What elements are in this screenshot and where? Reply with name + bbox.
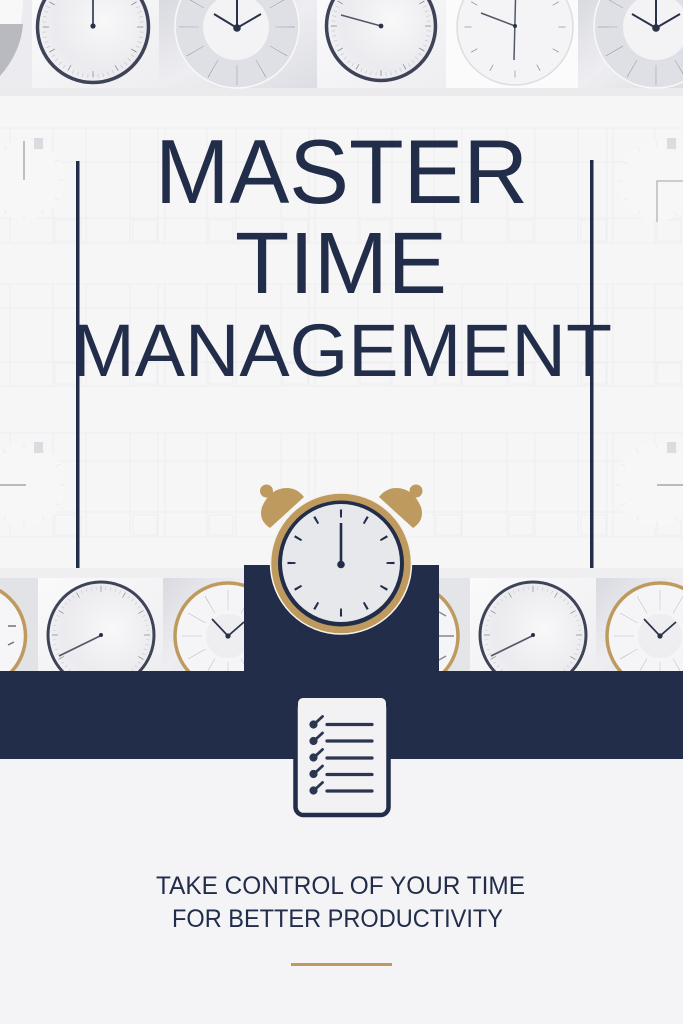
- title: [72, 122, 612, 392]
- right bell: [379, 488, 422, 528]
- clock face: [282, 504, 400, 622]
- right knob: [410, 484, 422, 498]
- clock hand: [340, 523, 342, 564]
- gold clock cropped left: [0, 589, 28, 671]
- icon: checklist: [296, 698, 388, 815]
- icon: alarm clock: [260, 484, 422, 634]
- tagline: TAKE CONTROL OF YOUR TIME: [156, 872, 525, 900]
- navy pedestal block: [244, 565, 439, 672]
- title: TIME: [235, 215, 447, 312]
- dark clock right: [478, 580, 588, 671]
- right vertical rule: [590, 160, 594, 570]
- clock 3: [326, 0, 436, 80]
- lower clocks row: [0, 580, 683, 671]
- left bell: [261, 488, 304, 528]
- clock rim: [270, 493, 412, 634]
- navy horizontal band: [0, 671, 683, 759]
- gold clock middle: [173, 581, 244, 671]
- clock inner ring: [278, 500, 404, 626]
- gold accent rule: [291, 963, 392, 966]
- clock 0: cropped: [0, 0, 23, 76]
- gold clock cropped by block: [439, 593, 460, 671]
- faint calendar grid pattern: [0, 128, 683, 537]
- tagline: [156, 872, 525, 933]
- title: MASTER: [155, 122, 528, 223]
- clock 2: [175, 0, 299, 88]
- top clock strip: [0, 0, 683, 96]
- gold clock right: [605, 581, 683, 671]
- left vertical rule: [76, 161, 80, 570]
- dark clock left: [46, 580, 156, 671]
- tagline: FOR BETTER PRODUCTIVITY: [172, 905, 503, 933]
- clock 4: [457, 0, 573, 85]
- hour ticks: [292, 514, 390, 612]
- clock 1: [38, 0, 148, 82]
- faint background clocks: [0, 138, 683, 527]
- left knob: [260, 484, 273, 498]
- lower clock strip: [0, 568, 683, 671]
- clock 5: [594, 0, 683, 88]
- light title area background: [0, 96, 683, 568]
- title: MANAGEMENT: [72, 309, 612, 392]
